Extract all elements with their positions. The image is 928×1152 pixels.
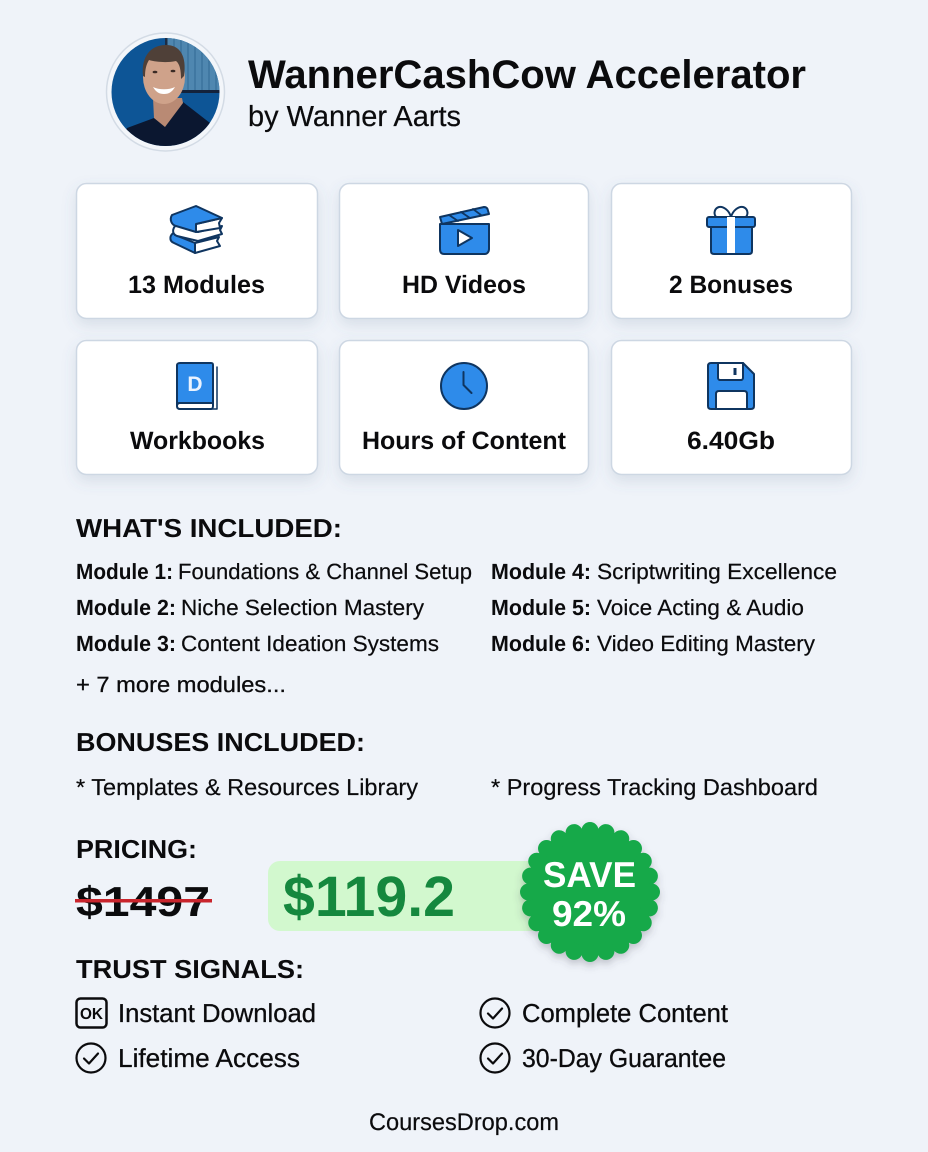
icon: floppy disk — [708, 363, 754, 409]
module 3: Content Ideation Systems — [181, 631, 439, 656]
icon: workbook: D — [187, 373, 203, 396]
signal: instant download: OK — [80, 1006, 103, 1023]
old price: $1497 — [76, 878, 210, 925]
module 2: Module 2: — [76, 595, 176, 620]
module 1: Foundations & Channel Setup — [178, 559, 472, 584]
card: HD Videos — [340, 184, 588, 318]
subtitle: by Wanner Aarts — [248, 101, 461, 133]
signal: guarantee: 30-Day Guarantee — [522, 1043, 726, 1073]
module 6 — [491, 631, 815, 656]
sale price — [268, 861, 558, 931]
card: Hours of Content — [340, 340, 588, 474]
icon: clock — [441, 363, 487, 409]
heading: WHAT'S INCLUDED: — [76, 513, 342, 543]
label: HD Videos — [402, 271, 526, 299]
save badge: SAVE — [543, 854, 636, 895]
icon: clapperboard — [440, 207, 489, 254]
module 5: Voice Acting & Audio — [597, 595, 804, 620]
sale price: $119.2 — [283, 865, 455, 929]
module 6: Video Editing Mastery — [597, 631, 815, 656]
heading: TRUST SIGNALS: — [76, 954, 304, 984]
heading: PRICING: — [76, 834, 197, 864]
card: 2 Bonuses — [612, 184, 852, 318]
card: 13 Modules — [76, 184, 318, 318]
section: what's included — [76, 513, 837, 697]
module 3 — [76, 631, 439, 656]
label: 13 Modules — [128, 271, 265, 299]
title: WannerCashCow Accelerator — [248, 53, 806, 97]
label: Workbooks — [130, 427, 265, 455]
more modules note: + 7 more modules... — [76, 672, 286, 697]
module 2 — [76, 595, 424, 620]
module 4 — [491, 559, 837, 584]
footer: CoursesDrop.com — [369, 1109, 559, 1136]
bonus 1: * Templates & Resources Library — [76, 774, 419, 800]
module 1: Module 1: — [76, 559, 173, 584]
section: trust signals — [76, 954, 729, 1073]
module 2: Niche Selection Mastery — [181, 595, 424, 620]
label: Hours of Content — [362, 427, 567, 455]
module 3: Module 3: — [76, 631, 176, 656]
icon: gift box — [707, 207, 755, 254]
section: bonuses — [76, 727, 818, 800]
module 4: Module 4: — [491, 559, 591, 584]
section: pricing — [75, 822, 660, 962]
icon: books — [170, 206, 222, 253]
card: Workbooks — [76, 340, 318, 474]
save badge — [520, 822, 660, 962]
module 5 — [491, 595, 804, 620]
header — [106, 33, 806, 151]
bonus 2: * Progress Tracking Dashboard — [491, 774, 818, 800]
signal: instant download: Instant Download — [118, 998, 316, 1028]
module 6: Module 6: — [491, 631, 591, 656]
module 5: Module 5: — [491, 595, 591, 620]
label: 6.40Gb — [687, 427, 775, 455]
save badge: 92% — [552, 893, 626, 934]
heading: BONUSES INCLUDED: — [76, 727, 365, 757]
icon: workbook — [177, 363, 217, 409]
module 4: Scriptwriting Excellence — [597, 559, 837, 584]
signal: lifetime access: Lifetime Access — [118, 1043, 300, 1073]
label: 2 Bonuses — [669, 271, 793, 299]
signal: complete content: Complete Content — [522, 998, 729, 1028]
card: 6.40Gb — [612, 340, 852, 474]
portrait avatar — [106, 33, 224, 151]
